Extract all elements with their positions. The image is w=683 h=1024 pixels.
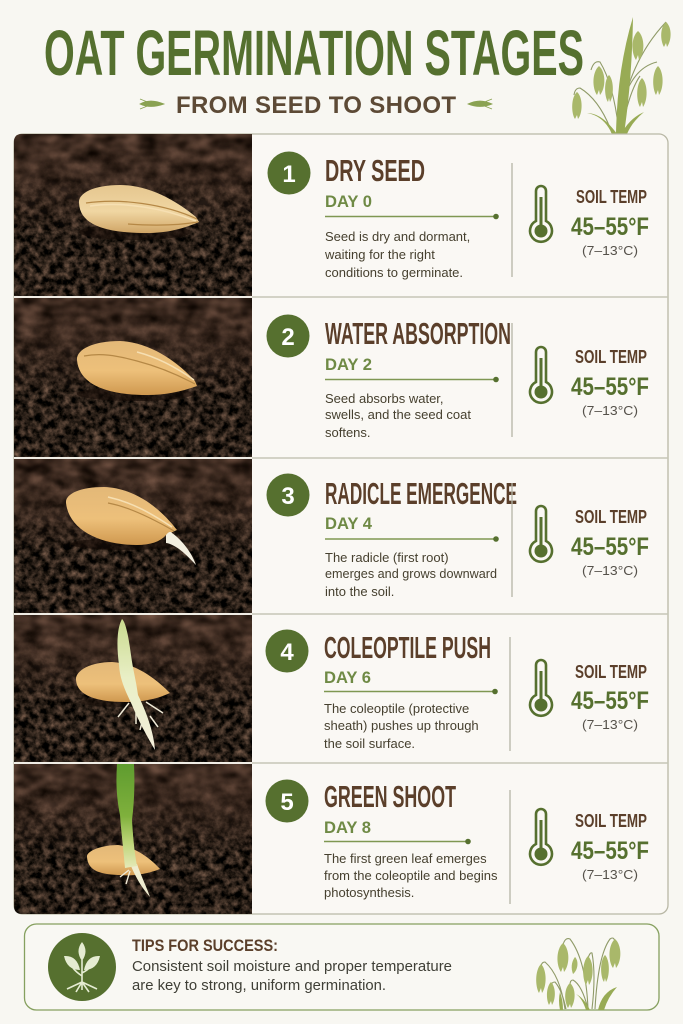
- day label: DAY 0: [325, 192, 372, 211]
- description: conditions to germinate.: [325, 265, 463, 280]
- soil temperature: 45–55°F: [571, 837, 649, 865]
- soil temperature: [571, 662, 649, 732]
- soil temperature: (7–13°C): [582, 403, 638, 418]
- photo 2: water absorption: [14, 298, 252, 457]
- soil temperature: (7–13°C): [582, 243, 638, 258]
- soil temperature: 45–55°F: [571, 373, 649, 401]
- day label: DAY 8: [324, 818, 371, 837]
- panel: stage photographs: [14, 134, 252, 914]
- soil temperature: 45–55°F: [571, 687, 649, 715]
- illustration: oat plant bottom right: [536, 938, 620, 1010]
- soil temperature: SOIL TEMP: [575, 662, 647, 682]
- soil temperature: (7–13°C): [582, 717, 638, 732]
- description: into the soil.: [325, 584, 394, 599]
- soil temperature: [571, 811, 649, 882]
- number badge 3: [266, 474, 310, 516]
- soil temperature: 45–55°F: [571, 533, 649, 561]
- photo 5: green shoot: [14, 764, 252, 914]
- heading: GREEN SHOOT: [324, 779, 456, 814]
- tips text: are key to strong, uniform germination.: [132, 978, 386, 994]
- description: Seed absorbs water,: [325, 391, 444, 406]
- description: photosynthesis.: [324, 885, 414, 900]
- number badge 5: [266, 780, 308, 822]
- heading: RADICLE EMERGENCE: [325, 476, 517, 511]
- heading: WATER ABSORPTION: [325, 316, 511, 351]
- stage 4: [266, 630, 649, 751]
- day label: DAY 6: [324, 668, 371, 687]
- soil temperature: 45–55°F: [571, 213, 649, 241]
- soil temperature: [571, 187, 649, 258]
- description: swells, and the seed coat: [325, 407, 471, 422]
- timeline rule: [324, 839, 471, 844]
- illustration: oat plant top right: [572, 17, 671, 134]
- stage 1: [268, 152, 649, 280]
- number badge 4: [266, 630, 308, 672]
- soil temperature: SOIL TEMP: [575, 507, 647, 527]
- stage 5: [266, 779, 649, 904]
- day label: DAY 4: [325, 514, 373, 533]
- icon: right leaf ornament: [468, 99, 492, 109]
- heading: DRY SEED: [325, 153, 425, 188]
- stage 2: [266, 314, 649, 440]
- icon: thermometer: [530, 809, 552, 865]
- number badge 4: 4: [280, 639, 294, 666]
- number badge 2: 2: [281, 324, 295, 351]
- soil temperature: (7–13°C): [582, 867, 638, 882]
- tips text: Consistent soil moisture and proper temperature: [132, 959, 452, 975]
- description: sheath) pushes up through: [324, 718, 479, 733]
- number badge 3: 3: [281, 483, 295, 510]
- soil temperature: SOIL TEMP: [575, 347, 647, 367]
- description: waiting for the right: [324, 247, 435, 262]
- soil temperature: [571, 347, 649, 418]
- row dividers: [14, 297, 668, 763]
- soil temperature: SOIL TEMP: [576, 187, 647, 207]
- photo 1: dry seed: [14, 134, 252, 296]
- timeline rule: [324, 689, 498, 694]
- number badge 5: 5: [280, 789, 294, 816]
- panel: tips for success: [24, 924, 659, 1010]
- icon: thermometer: [530, 186, 552, 242]
- soil temperature: (7–13°C): [582, 563, 638, 578]
- icon: left leaf ornament: [140, 99, 164, 109]
- icon: thermometer: [530, 506, 552, 562]
- soil temperature: [571, 507, 649, 578]
- timeline rule: [325, 377, 499, 382]
- description: The coleoptile (protective: [324, 701, 469, 716]
- tips heading: TIPS FOR SUCCESS:: [132, 936, 278, 955]
- description: The radicle (first root): [325, 550, 449, 565]
- description: the soil surface.: [324, 736, 415, 751]
- description: Seed is dry and dormant,: [325, 229, 470, 244]
- heading: COLEOPTILE PUSH: [324, 630, 491, 665]
- soil temperature: SOIL TEMP: [575, 811, 647, 831]
- subtitle: [140, 92, 492, 119]
- panel: stages: [14, 134, 668, 914]
- number badge 2: [266, 314, 310, 358]
- timeline rule: [325, 536, 499, 542]
- description: emerges and grows downward: [325, 566, 497, 581]
- timeline rule: [325, 214, 499, 219]
- subtitle text: FROM SEED TO SHOOT: [176, 92, 456, 119]
- description: The first green leaf emerges: [324, 851, 487, 866]
- number badge 1: [268, 152, 310, 194]
- description: softens.: [325, 425, 371, 440]
- icon: seedling badge: [48, 933, 116, 1001]
- stage 3: [266, 474, 649, 599]
- day label: DAY 2: [325, 355, 372, 374]
- icon: thermometer: [530, 660, 552, 716]
- number badge 1: 1: [282, 161, 296, 188]
- icon: thermometer: [530, 347, 552, 403]
- photo 4: coleoptile push: [14, 615, 252, 762]
- description: from the coleoptile and begins: [324, 868, 498, 883]
- photo 3: radicle emergence: [14, 459, 252, 613]
